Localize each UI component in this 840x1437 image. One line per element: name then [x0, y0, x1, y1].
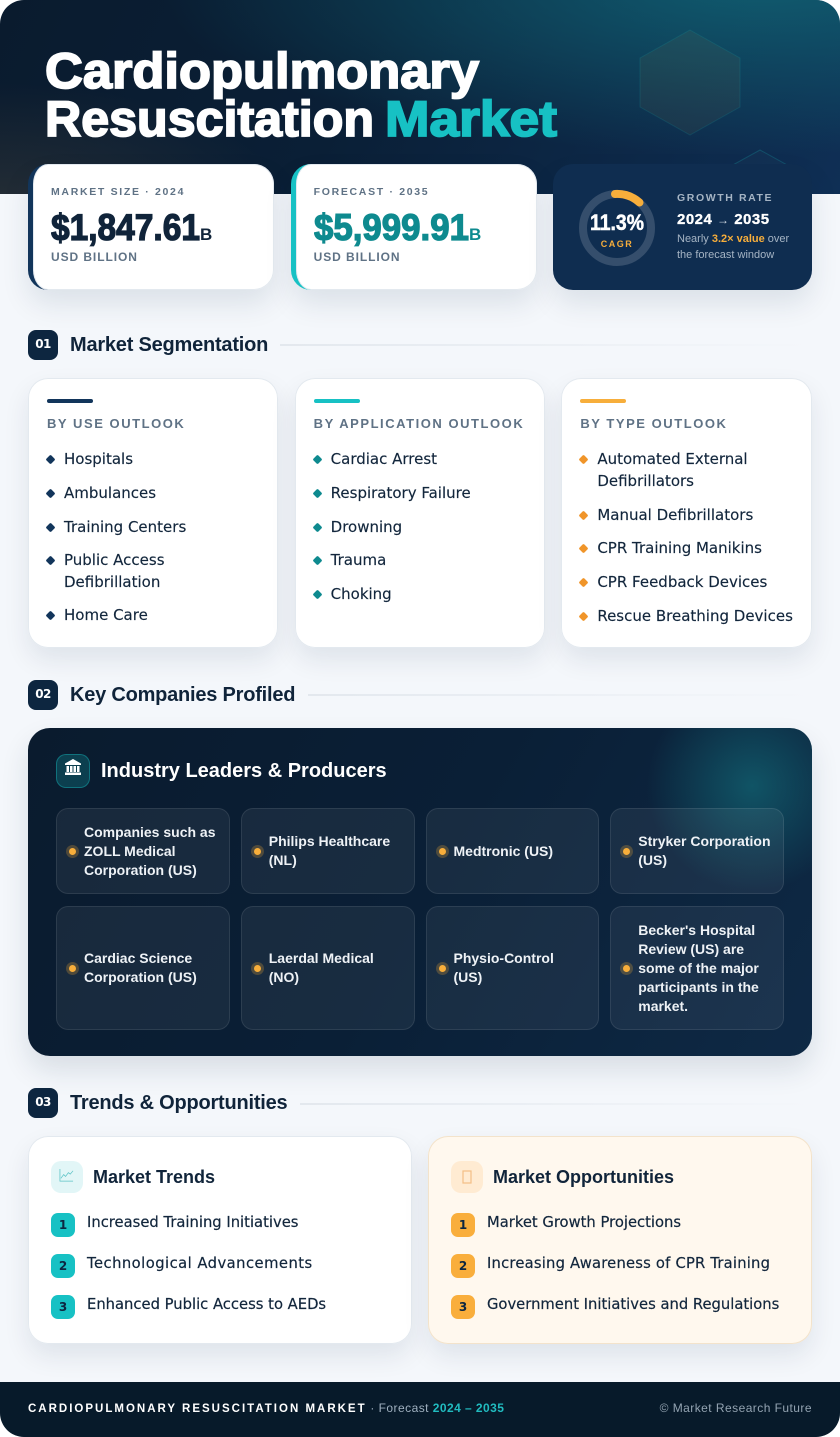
header banner — [0, 0, 840, 194]
company: Medtronic: Medtronic (US) — [454, 843, 553, 859]
company: Stryker: (US) — [638, 852, 667, 868]
list item: Defibrillators — [597, 472, 694, 490]
opportunity 3: 3 — [459, 1300, 467, 1314]
company: Becker's: Becker's Hospital — [638, 922, 755, 938]
icon: trend chart — [51, 1161, 83, 1193]
list item — [46, 551, 165, 591]
company: Becker's: Review (US) are — [638, 941, 744, 957]
list item: Drowning — [331, 518, 402, 536]
trend 3 — [51, 1295, 326, 1319]
list item — [579, 450, 748, 490]
opportunity 1: 1 — [459, 1218, 467, 1232]
title: Market — [385, 91, 557, 147]
section heading: market segmentation — [28, 330, 560, 360]
company: Cardiac Science — [56, 906, 230, 1030]
title — [45, 43, 558, 147]
company: Becker's: participants in the — [638, 979, 759, 995]
company: Medtronic — [426, 808, 599, 894]
list item: Respiratory Failure — [331, 484, 471, 502]
heading text: Key Companies Profiled — [70, 684, 295, 706]
unit: USD BILLION — [314, 250, 400, 264]
trend 1: 1 — [59, 1218, 67, 1232]
label: MARKET SIZE · 2024 — [51, 186, 185, 198]
company: Becker's: some of the major — [638, 960, 759, 976]
opportunity 2: 2 — [459, 1259, 467, 1273]
list item: Hospitals — [64, 450, 133, 468]
value: B — [469, 225, 481, 244]
company: Laerdal: (NO) — [269, 969, 299, 985]
value: $5,999.91 — [314, 208, 469, 248]
CAGR donut — [579, 190, 655, 266]
list item: Defibrillation — [64, 573, 160, 591]
description — [677, 233, 789, 261]
company: Becker's: market. — [638, 998, 688, 1014]
stat card: market size 2024 — [28, 164, 274, 290]
list item: Automated External — [597, 450, 748, 468]
company: Physio-Control: (US) — [454, 969, 482, 985]
number badge — [28, 680, 58, 710]
trend 2: Technological Advancements — [87, 1255, 313, 1272]
heading text: Trends & Opportunities — [70, 1092, 287, 1114]
unit: USD BILLION — [51, 250, 138, 264]
panel: market trends — [28, 1136, 412, 1344]
heading text: Market Segmentation — [70, 334, 268, 356]
trend 2: 2 — [59, 1259, 67, 1273]
company: Cardiac Science: Corporation (US) — [84, 969, 197, 985]
company: ZOLL: Corporation (US) — [84, 862, 197, 878]
list item: Cardiac Arrest — [331, 450, 437, 468]
panel heading: BY TYPE OUTLOOK — [580, 416, 727, 431]
period: 2024 → 2035 — [677, 211, 770, 228]
opportunity 2: Increasing Awareness of CPR Training — [487, 1255, 770, 1272]
company: Becker's — [610, 906, 784, 1030]
company: Stryker: Stryker Corporation — [638, 833, 770, 849]
opportunity 1 — [451, 1213, 681, 1237]
company: ZOLL: ZOLL Medical — [84, 843, 176, 859]
CAGR donut: 11.3% — [590, 210, 644, 235]
list item: Public Access — [64, 551, 165, 569]
list item: CPR Feedback Devices — [597, 573, 767, 591]
decorative hexagons — [640, 30, 786, 164]
description: the forecast window — [677, 249, 774, 261]
description: Nearly 3.2× value over — [677, 233, 789, 245]
number badge: 03 — [35, 1095, 51, 1109]
list item: Choking — [331, 585, 392, 603]
number badge — [28, 330, 58, 360]
value: B — [200, 225, 212, 244]
list item: Trauma — [331, 551, 386, 569]
panel: by type outlook — [561, 378, 812, 648]
number badge — [28, 1088, 58, 1118]
footer credit: © Market Research Future — [660, 1401, 812, 1415]
footer title: CARDIOPULMONARY RESUSCITATION MARKET · Forecast 2024 – 2035 — [28, 1401, 504, 1415]
list item: CPR Training Manikins — [597, 539, 762, 557]
section heading: key companies profiled — [28, 680, 572, 710]
trend 1 — [51, 1213, 298, 1237]
panel title: Market Opportunities — [493, 1167, 674, 1187]
list item: Rescue Breathing Devices — [597, 607, 793, 625]
number badge: 02 — [35, 687, 51, 701]
company: Philips — [241, 808, 414, 894]
list item: Training Centers — [64, 518, 186, 536]
trend 3: Enhanced Public Access to AEDs — [87, 1296, 326, 1313]
title: Resuscitation — [45, 91, 374, 147]
company: Philips: Philips Healthcare — [269, 833, 390, 849]
panel heading: BY APPLICATION OUTLOOK — [314, 416, 524, 431]
footer — [0, 1382, 840, 1437]
company: Physio-Control: Physio-Control — [454, 950, 554, 966]
opportunity 2 — [451, 1254, 770, 1278]
opportunity 3: Government Initiatives and Regulations — [487, 1296, 779, 1313]
company: Philips: (NL) — [269, 852, 297, 868]
panel title: Industry Leaders & Producers — [101, 760, 387, 782]
list item: Ambulances — [64, 484, 156, 502]
opportunity 1: Market Growth Projections — [487, 1214, 681, 1231]
title: Cardiopulmonary — [45, 43, 479, 99]
panel heading: BY USE OUTLOOK — [47, 416, 185, 431]
value: $1,847.61 — [51, 208, 200, 248]
growth label: GROWTH RATE — [677, 192, 773, 204]
company: Cardiac Science: Cardiac Science — [84, 950, 192, 966]
CAGR donut: CAGR — [601, 239, 633, 249]
list item: Home Care — [64, 606, 148, 624]
company: Physio-Control — [426, 906, 599, 1030]
number badge: 01 — [35, 337, 51, 351]
label: FORECAST · 2035 — [314, 186, 429, 198]
icon: bank — [56, 754, 90, 788]
company: Stryker — [610, 808, 784, 894]
list item: Manual Defibrillators — [597, 506, 753, 524]
company: ZOLL: Companies such as — [84, 824, 216, 840]
stat card: forecast 2035 — [291, 164, 537, 290]
trend 2 — [51, 1254, 313, 1278]
company: Laerdal: Laerdal Medical — [269, 950, 374, 966]
panel: market opportunities — [428, 1136, 812, 1344]
panel: by application outlook — [295, 378, 545, 648]
company: ZOLL — [56, 808, 230, 894]
panel: by use outlook — [28, 378, 278, 648]
stat card: growth rate — [553, 164, 812, 290]
company: Laerdal — [241, 906, 414, 1030]
icon: placeholder glyph — [451, 1161, 483, 1193]
section heading: trends and opportunities — [28, 1088, 568, 1118]
panel: industry leaders — [28, 728, 812, 1056]
panel title: Market Trends — [93, 1167, 215, 1187]
trend 1: Increased Training Initiatives — [87, 1214, 298, 1231]
opportunity 3 — [451, 1295, 779, 1319]
trend 3: 3 — [59, 1300, 67, 1314]
